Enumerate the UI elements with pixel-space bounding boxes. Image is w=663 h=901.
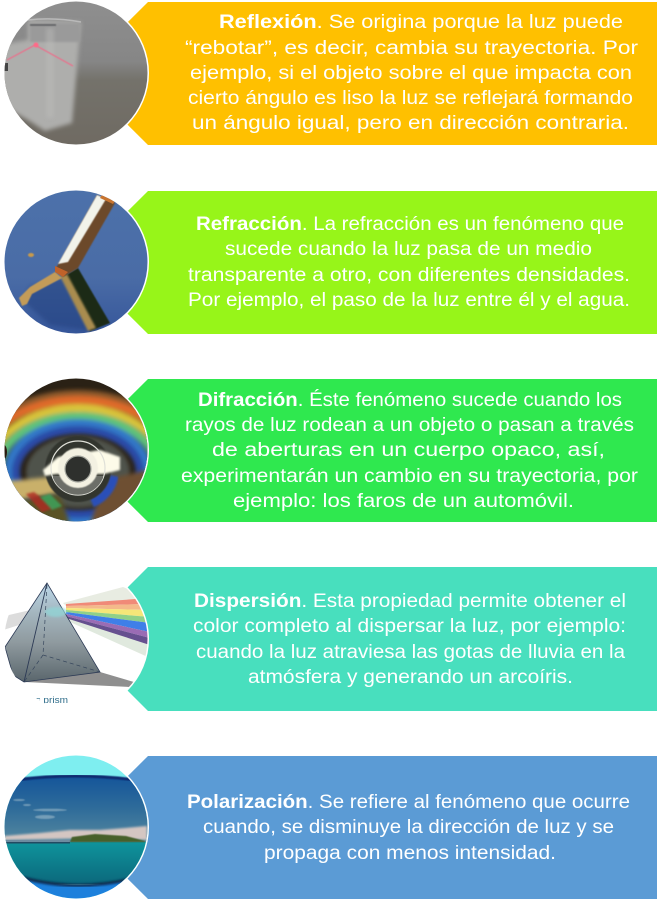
panel: Reflexión (0, 0, 657, 146)
text block: Difracción: experimentarán un cambio en su trayectoria, por (181, 466, 639, 487)
photo: island seen through polarized lens (0, 754, 150, 901)
text block: Polarización: propaga con menos intensidad. (264, 843, 556, 864)
text block: Reflexión: cierto ángulo es liso la luz se reflejará formando (188, 88, 633, 109)
text block: Dispersión: Dispersión . Esta propiedad permite obtener el (194, 591, 626, 612)
panel: Difracción (4, 378, 657, 522)
text block: Dispersión: color completo al dispersar la luz, por ejemplo: (193, 616, 626, 637)
photo: stick in water (0, 189, 150, 335)
spectrum bands (63, 587, 150, 658)
text block: Dispersión: atmósfera y generando un arcoíris. (248, 667, 573, 688)
text block: Polarización: Polarización . Se refiere al fenómeno que ocurre (187, 792, 630, 813)
photo: glass prism with spectrum (4, 582, 149, 704)
text block: Dispersión (193, 591, 626, 688)
prism shadow (25, 672, 134, 687)
panel shape: Dispersión (76, 567, 657, 711)
text block: Reflexión: un ángulo igual, pero en dirección contraria. (192, 113, 629, 134)
text block: Refracción: Refracción . La refracción es un fenómeno que (196, 214, 624, 235)
text block: Reflexión (185, 12, 639, 134)
text block: Refracción (188, 214, 630, 311)
photo: glass prism with spectrum: as prism (30, 695, 68, 705)
text block: Difracción: rayos de luz rodean a un objeto o pasan a través (185, 415, 634, 436)
text block: Reflexión: Reflexión . Se origina porque la luz puede (219, 12, 623, 33)
text block: Difracción (181, 390, 639, 512)
text block: Refracción: transparente a otro, con diferentes densidades. (188, 265, 630, 286)
panel: Dispersión (0, 566, 657, 712)
panel shape: Difracción (76, 379, 657, 522)
panel shape: Refracción (76, 191, 657, 334)
text block: Difracción: Difracción . Éste fenómeno sucede cuando los (198, 390, 622, 411)
text block: Difracción: de aberturas en un cuerpo opaco, así, (212, 440, 605, 461)
text block: Polarización: cuando, se disminuye la dirección de luz y se (203, 817, 614, 838)
text block: Refracción: sucede cuando la luz pasa de un medio (225, 239, 592, 260)
text block: Difracción: ejemplo: los faros de un automóvil. (233, 491, 574, 512)
panel: Polarización (0, 754, 657, 901)
panel shape: Polarización (76, 756, 657, 899)
text block: Refracción: Por ejemplo, el paso de la luz entre él y el agua. (188, 290, 630, 311)
panel: Refracción (0, 189, 657, 335)
text block: Dispersión: cuando la luz atraviesa las gotas de lluvia en la (196, 642, 625, 663)
panel shape: Reflexión (76, 2, 657, 145)
text block: Reflexión: “rebotar”, es decir, cambia su trayectoria. Por (185, 38, 639, 59)
photo: compact disc rainbow (4, 378, 149, 522)
text block: Polarización (187, 792, 630, 864)
photo: glass of water with laser (0, 0, 150, 146)
text block: Reflexión: ejemplo, si el objeto sobre el que impacta con (190, 63, 632, 84)
